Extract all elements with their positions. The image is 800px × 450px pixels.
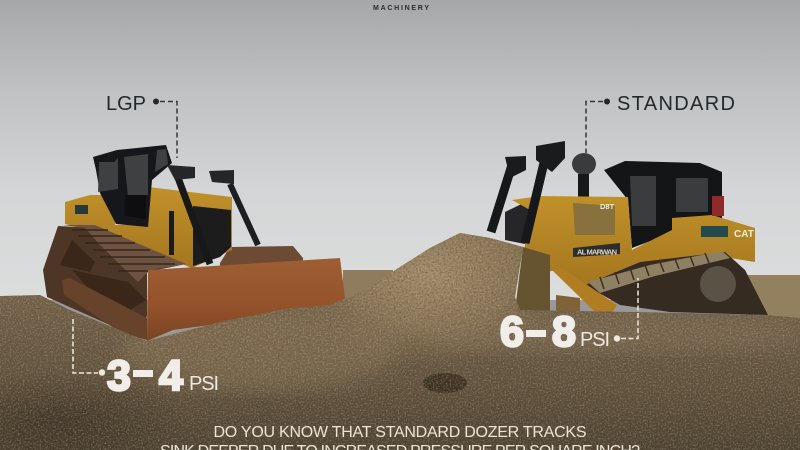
- bottom caption: DO YOU KNOW THAT STANDARD DOZER TRACKS: [214, 424, 586, 441]
- left dozer radiator grille: [193, 206, 231, 266]
- STANDARD callout: [586, 93, 735, 153]
- left dozer lift arms: [177, 175, 210, 264]
- standard pressure value: PSI: [580, 329, 610, 351]
- distant land left: [343, 270, 393, 305]
- right dozer red extinguisher: [712, 196, 724, 216]
- LGP callout: LGP: [106, 93, 146, 115]
- left dozer decal: [169, 211, 174, 255]
- header brand label: MACHINERY: [373, 5, 429, 12]
- right dozer body: [512, 196, 755, 285]
- right dozer name plate: [573, 243, 620, 257]
- left dozer rear plate: [220, 246, 303, 270]
- right dozer lights: [505, 141, 565, 178]
- right dozer blade side: [515, 247, 550, 312]
- right dozer cab: [604, 161, 722, 248]
- left dozer lights: [167, 165, 234, 184]
- right dozer: standard: [491, 141, 768, 315]
- LGP pressure value: PSI: [189, 373, 219, 395]
- left dozer body: [65, 187, 232, 268]
- sand ground and pile: [0, 215, 800, 450]
- left dozer track shoes: [72, 230, 175, 271]
- right dozer model badge: D8T: [600, 202, 615, 211]
- right dozer track: [585, 252, 768, 315]
- right dozer CAT logo: CAT: [734, 229, 754, 240]
- LGP callout: [106, 93, 177, 158]
- STANDARD callout: STANDARD: [617, 93, 735, 115]
- standard pressure value: 6: [500, 308, 524, 356]
- right dozer name plate: AL MARWAN: [577, 248, 617, 256]
- LGP pressure value: 3: [107, 352, 131, 400]
- left dozer track opening: [60, 240, 146, 310]
- standard pressure value: 8: [552, 308, 576, 356]
- left dozer: LGP: [43, 145, 346, 341]
- right dozer idler wheel: [700, 266, 736, 302]
- LGP pressure value: [73, 319, 219, 400]
- left dozer blade: [147, 258, 346, 341]
- right dozer lift arms: [491, 150, 547, 243]
- right dozer radiator: [505, 200, 530, 245]
- right dozer green decal: [701, 226, 728, 237]
- sky background: [0, 0, 800, 300]
- left dozer track: [43, 226, 186, 340]
- bottom caption: [160, 424, 640, 450]
- standard pressure value: [500, 278, 638, 356]
- left dozer push arm: [62, 278, 147, 340]
- left dozer cab: [93, 145, 172, 227]
- right dozer exhaust beacon: [572, 153, 596, 198]
- distant land right: [745, 275, 800, 320]
- right dozer window: [573, 203, 615, 235]
- LGP pressure value: 4: [159, 352, 183, 400]
- right dozer push arm: [552, 268, 617, 313]
- left dozer side badge: [75, 205, 88, 214]
